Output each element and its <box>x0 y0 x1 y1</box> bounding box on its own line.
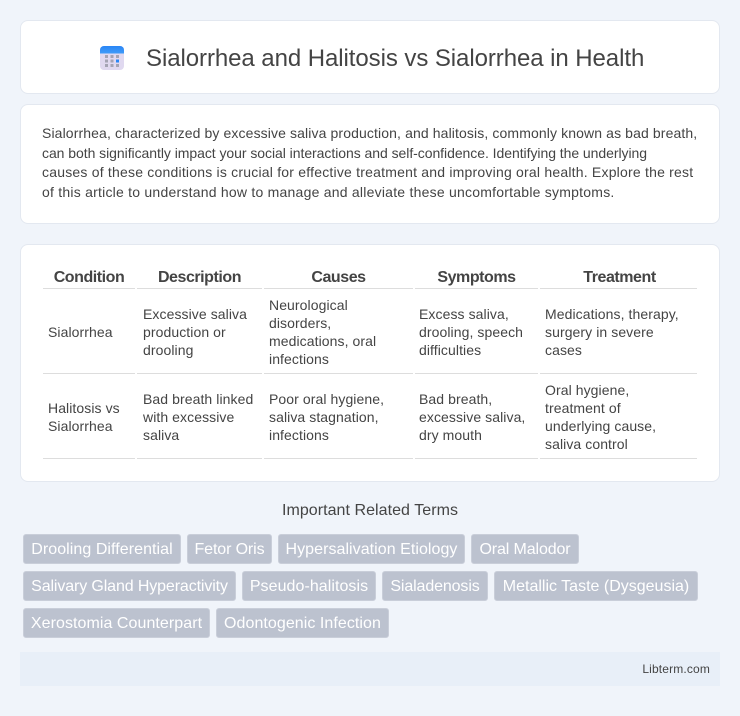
table row: Sialorrhea: Excess saliva, <box>419 306 509 322</box>
intro paragraph: of this article to understand how to manage and alleviate these uncomfortable symptoms. <box>42 184 615 200</box>
table row: Sialorrhea: Excessive saliva <box>143 306 247 322</box>
table row: Halitosis vs Sialorrhea: Oral hygiene, <box>545 382 629 398</box>
table row: Sialorrhea: surgery in severe <box>545 324 654 340</box>
tag: Drooling Differential <box>31 541 173 558</box>
table row: Sialorrhea: difficulties <box>419 342 481 358</box>
related terms heading: Important Related Terms <box>282 502 458 519</box>
tag: Hypersalivation Etiology <box>286 541 457 558</box>
table row: Sialorrhea: cases <box>545 342 582 358</box>
table row: Halitosis vs Sialorrhea: Halitosis vs <box>48 400 120 416</box>
table row: Halitosis vs Sialorrhea: Sialorrhea <box>48 418 113 434</box>
tag: Xerostomia Counterpart <box>31 615 202 632</box>
table header row: Description <box>158 269 241 286</box>
table row: Halitosis vs Sialorrhea: underlying cause, <box>545 418 656 434</box>
table row: Halitosis vs Sialorrhea: saliva stagnation, <box>269 409 379 425</box>
footer bar <box>20 652 720 686</box>
table row: Halitosis vs Sialorrhea <box>48 382 656 452</box>
title: Sialorrhea and Halitosis vs Sialorrhea in Health <box>146 45 644 72</box>
table row: Sialorrhea: Neurological <box>269 297 348 313</box>
table row: Sialorrhea: Medications, therapy, <box>545 306 679 322</box>
intro paragraph: can both significantly impact your social interactions and self-confidence. Identifying the underlying <box>42 144 647 160</box>
tag <box>471 534 579 564</box>
table row: Halitosis vs Sialorrhea: saliva <box>143 427 179 443</box>
table row: Sialorrhea: drooling <box>143 342 193 358</box>
table row: Halitosis vs Sialorrhea: treatment of <box>545 400 621 416</box>
table row: Sialorrhea: drooling, speech <box>419 324 523 340</box>
table row: Halitosis vs Sialorrhea: Bad breath linked <box>143 391 253 407</box>
intro text panel <box>20 104 720 224</box>
table row: Sialorrhea: Sialorrhea <box>48 324 113 340</box>
intro paragraph <box>42 125 697 200</box>
table row: Sialorrhea: infections <box>269 351 329 367</box>
table row: Halitosis vs Sialorrhea: dry mouth <box>419 427 482 443</box>
table row: Sialorrhea <box>48 297 679 367</box>
table row: Sialorrhea: disorders, <box>269 315 331 331</box>
table row: Halitosis vs Sialorrhea: Poor oral hygiene, <box>269 391 384 407</box>
table row: Halitosis vs Sialorrhea: excessive saliva, <box>419 409 525 425</box>
table header row: Condition <box>54 269 124 286</box>
table header row: Treatment <box>583 269 656 286</box>
tag: Pseudo-halitosis <box>250 578 368 595</box>
icon: calendar <box>100 46 124 70</box>
tag <box>23 608 210 638</box>
intro paragraph: Sialorrhea, characterized by excessive saliva production, and halitosis, commonly known as bad breath, <box>42 125 697 141</box>
table header row: Causes <box>311 269 366 286</box>
table row: Halitosis vs Sialorrhea: saliva control <box>545 436 628 452</box>
tag <box>242 571 376 601</box>
tag: Salivary Gland Hyperactivity <box>31 578 228 595</box>
tag <box>216 608 389 638</box>
tag <box>187 534 272 564</box>
footer credit: Libterm.com <box>642 662 710 676</box>
tag: Oral Malodor <box>479 541 571 558</box>
related terms tags <box>23 534 698 638</box>
table row: Halitosis vs Sialorrhea: with excessive <box>143 409 234 425</box>
tag: Sialadenosis <box>390 578 480 595</box>
table row: Halitosis vs Sialorrhea: Bad breath, <box>419 391 492 407</box>
table header row <box>54 269 656 286</box>
tag <box>23 571 236 601</box>
tag <box>278 534 465 564</box>
tag <box>382 571 488 601</box>
intro paragraph: causes of these conditions is crucial for effective treatment and improving oral health. Explore the rest <box>42 164 693 180</box>
tag: Odontogenic Infection <box>224 615 381 632</box>
table header row: Symptoms <box>437 269 516 286</box>
tag: Fetor Oris <box>195 541 264 558</box>
header panel <box>20 20 720 94</box>
table row: Sialorrhea: medications, oral <box>269 333 376 349</box>
table row: Halitosis vs Sialorrhea: infections <box>269 427 329 443</box>
table row: Sialorrhea: production or <box>143 324 226 340</box>
comparison table panel <box>20 244 720 482</box>
tag: Metallic Taste (Dysgeusia) <box>503 578 689 595</box>
tag <box>23 534 181 564</box>
tag <box>494 571 698 601</box>
